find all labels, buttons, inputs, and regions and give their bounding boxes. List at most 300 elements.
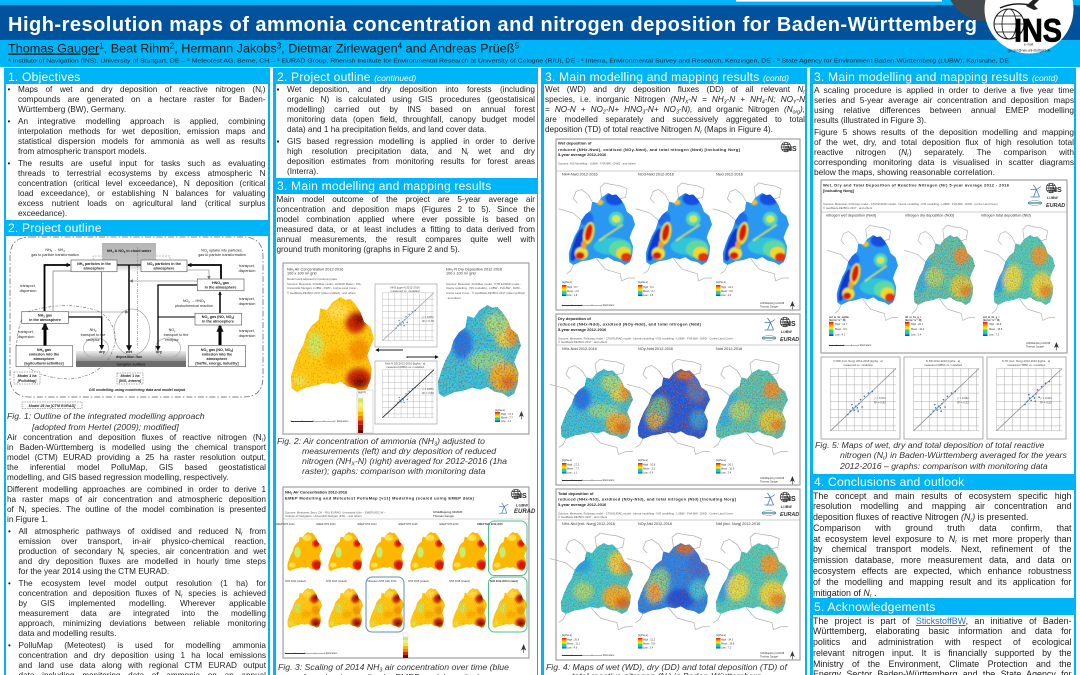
heading: main results continued (column 4): 3. Main modelling and mapping results (contd): [814, 70, 1058, 84]
logo: INS: [984, 0, 1074, 54]
text: main results: [276, 195, 535, 254]
authors: , Dietmar Zirlewagen: [281, 42, 398, 56]
affiliations: 5: [777, 57, 781, 62]
figure 1: integrated modelling diagram: particles in the: [84, 262, 111, 266]
figure 4: total deposition panel: NHx-Ntd [incl. Norg] 2012-2016: [562, 522, 615, 526]
figure 4: dry deposition panel: High : 17.2: [567, 464, 580, 466]
caption: figure 2: nitrogen (NHX-N) (right) averaged for 2012-2016 (1ha: [302, 456, 507, 468]
text: figure 5 description: Figure 5 shows results of the deposition modelling and mapping: [814, 127, 1074, 137]
figure 5: wet, dry and total deposition maps: [kg ha⁻¹a⁻¹ N]: [983, 318, 1000, 322]
figure 4: dry deposition panel: Low : 0.4: [643, 472, 654, 474]
figure 4: wet deposition panel: Mean : 5.6: [721, 290, 733, 293]
text: conclusions: of the modelling and mapping result and its application for: [813, 577, 1072, 587]
figure 1: integrated modelling diagram: dispersion: [239, 269, 255, 273]
logo: INS: INS: [1014, 12, 1062, 48]
figure 1: integrated modelling diagram: [agricultural activities]: [24, 362, 64, 366]
caption: figure 2: Fig. 2: Air concentration of ammonia (NH3) adjusted to: [277, 436, 485, 448]
figure 4: wet deposition panel: NO3-Nwd 2012-2016: [638, 172, 674, 176]
figure 1: integrated modelling diagram: gas: [222, 281, 229, 285]
text: regression bullet: high resolution precipitation data, and Nr wet and dry: [287, 147, 535, 158]
figure 5: wet, dry and total deposition maps: Low : 7.2: [989, 334, 1000, 336]
caption: figure 2: raster); gaphs: comparison with monitoring data: [302, 466, 486, 476]
text: main results: measured data, or at least includes a fitting to data derived from: [276, 225, 535, 234]
scatter: NH3 concentration: y = 0,87x: [422, 315, 434, 319]
caption: figure 5: [815, 440, 1067, 471]
figure 2: NH3 air concentration and dry deposition: NH: [446, 268, 451, 272]
figure 3: scaling of NH3 concentration: Institute of Navigation, Universität Stuttgart (INS) – and others: [285, 514, 362, 518]
figure 1: integrated modelling diagram: transport,: [239, 264, 255, 268]
figure 1: integrated modelling diagram: NO: [202, 315, 207, 319]
text: resolution bullet: The ecosystem level model output resolution (1 ha) for: [18, 579, 266, 588]
text: conclusions: by chemical transport models. Next, refinement of the: [813, 544, 1072, 554]
figure 1: integrated modelling diagram: [traffic, energy, industry]: [195, 362, 239, 366]
figure 1: integrated modelling diagram: receptor surface: [117, 362, 145, 366]
text: model combination: [7, 485, 266, 524]
figure 1: integrated modelling diagram: emission into the: [29, 352, 59, 356]
figure 1: integrated modelling diagram: [10, 237, 263, 408]
figure 1: integrated modelling diagram: Model 25 ha [CTM EURAD]: [29, 404, 76, 408]
column 4 frame: [810, 68, 1076, 675]
row labels: scaled: NH3 2012-2016 (scaled): [490, 580, 518, 583]
figure 4: total deposition panel: NOy-Ntd 2012-2016: [638, 522, 672, 526]
text: wet and dry deposition fluxes: [545, 85, 806, 136]
text: conclusions: at ecosystem level exposure to Nr is met more properly than: [813, 534, 1072, 545]
text: conclusions: mitigation of Nr .: [813, 588, 877, 599]
logos: figure 3: LUBW: [516, 502, 529, 508]
text: acknowledgements: relevant nitrogen input. It is financially supported by the: [813, 648, 1072, 658]
figure 1: integrated modelling diagram: 2: [231, 349, 233, 353]
text: objectives bullet 3: concentration (critical level exceedance), N deposition (critical: [18, 179, 266, 188]
figure 5: wet, dry and total deposition maps: © GeoBasis-DE BKG 2017 - and others: [823, 206, 873, 210]
scatter: N total deposition: measured (TBM) vs. modelled: [1007, 363, 1045, 367]
figure 2: NH3 air concentration and dry deposition: Sources: Meteotest, PolluMap model - EURAD Model - INS,: [287, 282, 362, 286]
figure 3: scaling of NH3 concentration: Sources: Meteotest, Bern, CH – RIU EURAD, Universität Köln – EMEP MSC-W –: [285, 510, 386, 514]
figure 1: integrated modelling diagram: uptake into particles,: [208, 248, 243, 252]
heading: project outline continued: 2. Project outline (continued): [277, 70, 416, 84]
legend: NH3 classes: [357, 390, 373, 433]
text: model description: Air concentration and deposition fluxes of reactive nitrogen (Nr): [7, 433, 266, 444]
text: conclusions: resolution modelling and mapping air concentration and: [813, 501, 1072, 511]
scatter: NH3 concentration: [375, 284, 437, 347]
figure 1: integrated modelling diagram: 3: [220, 282, 222, 286]
figure 5: wet, dry and total deposition maps: High : 26.1: [911, 323, 924, 326]
column 3 frame: [541, 68, 807, 675]
figure 4: dry deposition panel: GIS/Mapping 11/2018: [760, 477, 785, 480]
figure 4: dry deposition panel: NOy-Ndd 2012-2016: [638, 347, 673, 351]
figure 1: integrated modelling diagram: NH: [107, 249, 112, 253]
figure 1: integrated modelling diagram: transport to the: [81, 333, 105, 337]
text: pathways bullet: for the year 2014 using the CTM EURAD.: [18, 567, 169, 576]
figure 4: wet deposition panel: Thomas Gauger: [760, 306, 778, 308]
row labels: EMEP: EMEP NH3 2013: [316, 523, 336, 526]
figure 2: NH3 air concentration and dry deposition: - and others: [446, 296, 462, 300]
figure 4: wet deposition panel: Sources: INS Modelling - LUBW - FVA-BW - DWD - and others: [558, 162, 636, 166]
figure 5: wet, dry and total deposition maps: nitrogen wet deposition (Nwd): [826, 214, 877, 218]
figure 4: wet deposition panel: Low : 1.8: [643, 294, 654, 297]
text: conclusions: Comparison with ground truth data confirm, that: [813, 523, 1072, 533]
figure 4: total deposition panel: [kg/ha·a]: [716, 634, 726, 637]
text: model combination: in Figure 1.: [7, 515, 48, 524]
figure 5: wet, dry and total deposition maps: Thomas Gauger: [1026, 346, 1044, 348]
figure 2: NH3 air concentration and dry deposition: -N Dry Deposition 2012-2016: [453, 268, 502, 272]
scatter: N dry deposition: y = 0,99x: [957, 396, 969, 400]
figure 5: wet, dry and total deposition maps: [including Norg]: [823, 188, 855, 193]
text: objectives bullet 2: interpolation methods for wet deposition, emission maps and: [18, 127, 266, 136]
text: main results: concentration and deposition maps (Figures 2 to 5). Since the: [276, 205, 535, 214]
figure 5: wet, dry and total deposition maps: [821, 180, 1067, 353]
figure 4: dry deposition panel: Mean : 10.9: [721, 468, 735, 470]
figure 4: dry deposition panel: Ndd 2012-2016: [716, 347, 742, 351]
figure 1: integrated modelling diagram: dispersion: [18, 335, 34, 339]
figure 5: wet, dry and total deposition maps: dd_m_6s_g_r: [905, 316, 921, 319]
figure 4: total deposition panel: Low : 7.2: [721, 646, 732, 650]
figure 4: wet deposition panel: reduced (NHx-Nwd), oxidised (NOy-Nwd), and total nitrogen (Nwd) [including Norg]: [558, 147, 741, 152]
legend: dry deposition: [495, 409, 514, 423]
scatter: N wet deposition: measured vs. modelled: [844, 363, 873, 367]
figure 1: integrated modelling diagram: y: [206, 350, 208, 353]
scatter: NHx-N dry deposition: NHx-N DD 2012-2016 [kg/ha · a]: [385, 362, 426, 366]
caption: figure 2: measurements (left) and dry deposition of reduced: [302, 446, 496, 456]
scatter: NH3 concentration: R² = 0,78: [422, 319, 434, 323]
text: ▪: [276, 85, 279, 94]
figure 1: integrated modelling diagram: dry: [99, 350, 106, 354]
scatter: NHx-N dry deposition: y = 0,87x: [422, 387, 434, 391]
scatter: N dry deposition: N DD 2012-2016 [kg/ha · a]: [926, 359, 960, 363]
affiliations: 4: [581, 57, 585, 62]
scale and north arrow: figure 3: [285, 644, 526, 655]
affiliations: 3: [277, 57, 280, 62]
text: objectives bullet 1: [8, 85, 266, 114]
scale bar: kilometers: [337, 420, 349, 423]
figure 1: integrated modelling diagram: NO: [147, 262, 153, 266]
figure 1: integrated modelling diagram: [INS, Interra]: [118, 379, 142, 383]
figure 5: wet, dry and total deposition maps: [kg ha⁻¹a⁻¹ N]: [905, 318, 922, 322]
figure 1: integrated modelling diagram: 4: [63, 249, 65, 253]
figure 2: NH3 air concentration and dry deposition: 3: [292, 268, 294, 272]
affiliations: 2: [187, 57, 191, 62]
figure 4: dry deposition panel: [kg/ha·a]: [716, 459, 726, 462]
scatter: NHx-N dry deposition: measured (DBM) vs. modelled: [386, 365, 424, 369]
figure 1: integrated modelling diagram: atmosphere: [207, 357, 227, 361]
text: wet and dry deposition bullet: data) and 1 ha precipitation fields, and land cover data.: [287, 125, 486, 134]
figure 2: NH3 air concentration and dry deposition: 3: [451, 268, 453, 272]
figure 4: total deposition panel: Low : 4.9: [567, 646, 578, 650]
text: resolution bullet: data and modelling results.: [18, 629, 116, 638]
figure 1: integrated modelling diagram: NO: [183, 299, 188, 303]
caption: figure 3: Fig. 3: Scaling of 2014 NH3 air concentration over time (blue: [278, 662, 509, 674]
text: objectives bullet 2: from atmospheric transport models.: [18, 147, 147, 156]
figure 4: dry deposition panel: INS: [784, 321, 796, 328]
text: wet and dry deposition fluxes: Wet (WD) and dry deposition fluxes (DD) of all relevant Nr: [545, 85, 805, 96]
figure 1: integrated modelling diagram: photochemical reaction: [175, 304, 213, 308]
legend: dry deposition: [kg/ha·a]: [495, 409, 505, 412]
text: objectives bullet 3: [8, 159, 266, 218]
figure 1: integrated modelling diagram: NH: [37, 348, 42, 352]
text: model combination: of Nr species. The outline of the model combination is presented: [7, 505, 266, 516]
text: PolluMap bullet: [8, 641, 266, 675]
frames: green and blue highlights: [366, 521, 527, 632]
figure 4: wet deposition panel: kilometers: [603, 304, 615, 307]
figure 1: integrated modelling diagram: dispersion: [239, 302, 255, 306]
figure 4: dry deposition panel: Sources: Meteotest, Polluway model - CTM EURAD model - Interra modelling - INS modelling - LUBW - FVA-BW - DWD - Corine Land Cover: [558, 336, 733, 340]
figure 1: integrated modelling diagram: wet: [125, 350, 133, 354]
text: pathways bullet: and dry deposition fluxes are modelled in hourly time steps: [18, 557, 266, 566]
scatter: N dry deposition: measured (DBM) vs. modelled: [924, 363, 962, 367]
figure 2: NH3 air concentration and dry deposition: Interra modelling - INS modelling - LUBW - FVA-BW - DWD -: [446, 286, 521, 290]
figure 4: dry deposition panel: 5-year average 2012-2016: [558, 327, 607, 332]
figure 2: NH3 air concentration and dry deposition: 100 x 100 m² grid: [446, 272, 476, 276]
text: wet and dry deposition bullet: organic N) is calculated using GIS procedures (geostatisical: [287, 95, 535, 104]
text: figure 5 description: corresponding monitoring data is visualised in scatter diagrams: [814, 157, 1074, 167]
caption: figure 2: [277, 436, 507, 476]
text: objectives bullet 3: The results are useful input for tasks such as evaluating: [18, 159, 266, 168]
text: regression bullet: (Interra).: [287, 167, 318, 176]
figure 1: integrated modelling diagram: receptor: [165, 338, 180, 342]
text: objectives bullet 3: threads to terrestrial ecosystems by excess atmospheric N: [18, 169, 266, 178]
row labels: EMEP: EMEP NH3 2015: [398, 523, 418, 526]
scatter: N wet deposition: [821, 357, 900, 439]
figure 4: total deposition panel: High : 34.3: [721, 638, 734, 642]
text: objectives bullet 3: exceedance).: [18, 209, 67, 218]
figure 1: integrated modelling diagram: Model 1 ha: [17, 374, 37, 378]
text: figure 5 description: below the maps, showing reasonable correlation.: [814, 167, 995, 177]
text: objectives bullet 3: load exceedance), or establishing N balances for valuating: [18, 189, 266, 198]
figure 4: wet deposition panel: NH4-Nwd 2012-2016: [562, 172, 598, 176]
figure 5: wet, dry and total deposition maps: GIS/Mapping 11/2018: [1026, 342, 1051, 345]
figure 1: integrated modelling diagram: Model 1 ha: [120, 374, 140, 378]
authors: Thomas Gauger: [8, 42, 99, 56]
figure 4: wet deposition panel: Mean : 2.9: [567, 290, 579, 293]
figure 4: wet deposition panel: Low : 1.8: [567, 294, 578, 297]
scatter: N total deposition: N TD (incl. Norg) 2012-2016 [kg/ha · a]: [1002, 359, 1050, 363]
text: •: [8, 85, 10, 94]
figure 1: integrated modelling diagram: in the atmosphere: [202, 320, 234, 324]
scatter: NH3 concentration: NH3 [µg/m³] 2012-2016: [390, 286, 420, 290]
affiliations: State Agency for Environment Baden-Württemberg (LUBW), Karlsruhe, DE: [780, 58, 1009, 64]
logo: INS: gauger@nav.uni-stuttgart.de: [1008, 48, 1050, 52]
figure 1: integrated modelling diagram: NO: [201, 248, 207, 252]
figure 1: integrated modelling diagram: NO: [169, 328, 174, 332]
text: PolluMap bullet: and land use data along with regional CTM EURAD output: [18, 661, 266, 670]
column 1 frame: [4, 68, 270, 675]
figure 2: NH3 air concentration and dry deposition: © GeoBasis-DE BKG 2017 (data modified) - and others: [287, 291, 356, 295]
text: acknowledgements: Württemberg, elaborating basic information and data for: [813, 626, 1072, 636]
heading: project outline: 2. Project outline: [8, 221, 102, 235]
grey corner circle: [946, 0, 1024, 21]
figure 2: NH3 air concentration and dry deposition: Model result adjusted to monitoring data: [287, 277, 337, 281]
figure 2: NH3 air concentration and dry deposition: NH: [287, 268, 292, 272]
column 2 frame: [273, 68, 538, 675]
figure 4: dry deposition panel: reduced (NHx-Ndd), oxidised (NOy-Ndd), and total nitrogen (Ndd): [558, 322, 702, 326]
figure 4: total deposition panel: reduced (NHx-Ntd), oxidised (NOy-Ntd), and total nitrogen (Ntd) [including Norg]: [558, 496, 737, 502]
figure 4: dry deposition panel: kilometers: [603, 479, 615, 482]
figure 4: total deposition panel: 5-year average 2012-2016: [558, 502, 607, 507]
figure 1: integrated modelling diagram: in cloud water: [125, 249, 152, 253]
text: wet and dry deposition fluxes: are modelled separately and successively aggregated to total: [545, 115, 805, 124]
maps: EMEP row: [287, 532, 527, 571]
logo: INS: e-mail:: [1024, 42, 1034, 46]
figure 1: integrated modelling diagram: 3: [124, 250, 126, 254]
figure 1: integrated modelling diagram: 3: [51, 249, 53, 253]
figure 5: wet, dry and total deposition maps: LUBW: [1047, 196, 1058, 200]
scatter: NHx-N dry deposition: R² = 0,59: [422, 391, 434, 395]
affiliations: Meteotest AG, Berne, CH –: [190, 58, 277, 64]
text: PolluMap bullet: concentration and dry deposition using 1 ha local emissions: [18, 651, 266, 660]
caption: figure 1: [7, 411, 205, 432]
figure 4: total deposition panel: [kg/ha·a]: [562, 634, 572, 637]
figure 4: total deposition panel: Total deposition of: [558, 491, 594, 496]
text: wet and dry deposition bullet: modelling) carried out by INS based on annual forest: [287, 105, 535, 114]
header band: [0, 0, 1080, 67]
logos: figure 3: EURAD: [514, 509, 536, 515]
row labels: scaled: Meteotest NH3 [v11] 2014: [368, 580, 397, 583]
figure 4: dry deposition panel: High : 10.8: [643, 464, 656, 466]
affiliations: EURAD Group, Rhenish Institute for Environmental Research at University of Cologne (RIU), DE -: [280, 58, 581, 64]
text: pathways bullet: production of secondary Nr species, air concentration and wet: [18, 547, 266, 558]
text: figure 5 description: [814, 127, 1074, 177]
row labels: EMEP: EMEP NH3 2014: [358, 523, 377, 526]
figure 5: wet, dry and total deposition maps: Mean : 6.9: [835, 328, 847, 331]
text: PolluMap bullet: PolluMap (Meteotest) is used for modelling ammonia: [18, 641, 266, 650]
caption: figure 5: 2012-2016 – graphs: comparison with monitoring data: [840, 461, 1048, 471]
text: main results: annual measurements, the result compares quite well with: [276, 235, 535, 244]
figure 1: integrated modelling diagram: transport,: [20, 284, 36, 288]
row labels: EMEP: EMEP NH3 2012-2016: [477, 523, 503, 526]
figure 4: wet deposition panel: 5-year average 2012-2016: [558, 152, 607, 157]
text: model description: in Baden-Württemberg is modelled using the chemical transport: [7, 443, 266, 452]
figure 1: integrated modelling diagram: y: [207, 317, 209, 320]
figure 4: total deposition panel: Mean : 11.1: [567, 642, 581, 646]
caption: figure 4: Fig. 4: Maps of wet (WD), dry (DD) and total deposition (TD) of: [546, 662, 787, 672]
legend: dry deposition: High : 17.2: [501, 413, 514, 416]
text: acknowledgements: The project is part of StickstoffBW, an initiative of Baden-: [813, 616, 1071, 626]
arrow: to right map: [407, 357, 438, 358]
figure 1: integrated modelling diagram: gas: [45, 314, 52, 318]
figure 3: scaling of NH3 concentration: Air Concentration 2012-2016: [292, 490, 348, 494]
text: objectives bullet 1: Württemberg (BW), Germany.: [18, 105, 126, 114]
figure 5: wet, dry and total deposition maps: Low : 4.1: [835, 334, 846, 336]
figure 1: integrated modelling diagram: 4: [82, 263, 84, 267]
figure 4: total deposition panel: Ntd [incl. Norg] 2012-2016: [716, 522, 760, 526]
text: scaling procedure: using relative differences between annual EMEP modelling: [814, 105, 1074, 115]
figure 4: total deposition panel: High : 12.2: [643, 638, 656, 642]
figure 5: wet, dry and total deposition maps: High : 14.7: [835, 323, 848, 326]
figure 1: integrated modelling diagram: transport,: [239, 329, 255, 333]
text: model description: modelling, and GIS based regression modelling, respectively.: [7, 473, 228, 482]
text: regression bullet: [276, 137, 535, 176]
figure 4: dry deposition panel: Mean : 7.7: [567, 468, 579, 470]
figure 1: integrated modelling diagram: transport,: [239, 297, 255, 301]
authors: 5: [514, 42, 520, 50]
figure 4: dry deposition panel: High : 26.1: [721, 464, 734, 466]
figure 4: total deposition panel: LUBW: [781, 505, 792, 509]
text: acknowledgements: Ministry of the Environment, Climate Protection and the: [813, 659, 1072, 669]
scatter: NH3 concentration: measured vs. modelled: [391, 289, 420, 293]
row labels: scaled: NH3 2016 (scaled): [449, 580, 470, 583]
title band: [0, 5, 1080, 40]
figure 1: integrated modelling diagram: NO: [201, 348, 206, 352]
row labels: EMEP: EMEP NH3 2016: [440, 523, 459, 526]
scatter: N wet deposition: R² = 0,82: [874, 400, 886, 404]
text: figure 5 description: reactive nitrogen (Nr) separately. The comparison with: [814, 147, 1074, 158]
heading: conclusions: 4. Conclusions and outlook: [814, 475, 964, 489]
figure 5: wet, dry and total deposition maps: INS: [1050, 187, 1062, 194]
scale bar: [291, 420, 349, 423]
figure 1: integrated modelling diagram: gas to particle transformation: [31, 253, 79, 257]
text: objectives bullet 2: [8, 117, 266, 156]
figure 4: dry deposition panel: Dry deposition of: [558, 316, 592, 321]
row labels: EMEP: EMEP NH3 2012: [276, 523, 295, 526]
figure 1: integrated modelling diagram: 3: [204, 300, 206, 304]
figure 1: integrated modelling diagram: gas (NO, NO: [209, 315, 232, 319]
row labels: EMEP: [276, 523, 503, 526]
affiliations: 1: [8, 57, 12, 62]
figure 1: integrated modelling diagram: gas (NO, NO: [208, 348, 231, 352]
text: pathways bullet: [8, 527, 266, 576]
text: resolution bullet: measurement data are integrated into the modelling: [18, 609, 266, 618]
text: objectives bullet 1: Maps of wet and dry deposition of reactive nitrogen (Nr): [18, 85, 266, 96]
figure 4: dry deposition panel: [kg/ha·a]: [562, 459, 572, 462]
white bar at top: [736, 0, 942, 2]
figure 5: wet, dry and total deposition maps: wd_m_6s_ag/dw: [829, 316, 849, 319]
text: objectives bullet 1: compounds are generated on a hectare raster for Baden-: [18, 95, 266, 104]
figure 1: integrated modelling diagram: deposition flux: [116, 355, 143, 359]
figure 1: integrated modelling diagram: NH: [45, 248, 51, 252]
text: resolution bullet: approach, minimizing deviations between reliable monitoring: [18, 619, 266, 628]
figure 4: wet deposition panel: High : 5.4: [643, 286, 654, 289]
figure 1: integrated modelling diagram: HNO: [212, 281, 220, 285]
text: •: [8, 117, 10, 126]
text: acknowledgements: [813, 616, 1072, 675]
figure 1: integrated modelling diagram: dispersion: [239, 334, 255, 338]
figure 1: integrated modelling diagram: particles in the: [154, 262, 181, 266]
caption: figure 1: Fig. 1: Outline of the integrated modelling approach: [7, 411, 205, 421]
heading: objectives: 1. Objectives: [8, 70, 81, 84]
text: wet and dry deposition bullet: [276, 85, 535, 134]
text: main results: model combination applied where ever possible is based on: [276, 215, 535, 224]
scatter: N dry deposition: R² = 0,32: [957, 400, 969, 404]
figure 4: total deposition panel: Sources: Meteotest, Polluway model - CTM EURAD model - Interra modelling - INS modelling - LUBW - FVA-BW - DWD - Corine Land Cover: [558, 512, 733, 516]
maps: scaled row: [287, 588, 527, 628]
heading: acknowledgements: 5. Acknowledgements: [814, 600, 935, 614]
text: figure 5 description: of the wet, dry, and total deposition flux of high resolution total: [814, 137, 1074, 147]
figure 1: integrated modelling diagram: 2: [188, 300, 190, 304]
figure 1: integrated modelling diagram: → NH: [52, 248, 64, 252]
text: conclusions: [813, 490, 1072, 599]
heading: main results: 3. Main modelling and mapping results: [277, 179, 491, 193]
figure 1: integrated modelling diagram: 3: [42, 349, 44, 353]
text: scaling procedure: results (illustrated in Figure 3).: [814, 115, 926, 125]
text: objectives bullet 3: excess nutrient loads on agricultural land (critical surplus: [18, 199, 266, 208]
legend: dry deposition: Mean : 7.7: [501, 416, 513, 420]
caption: figure 1: [adopted from Hertel (2009); modified]: [32, 422, 179, 432]
figure 4: total deposition panel: EURAD: [780, 512, 799, 518]
text: resolution bullet: concentration and deposition fluxes of Nr species is achieved: [18, 589, 266, 600]
authors: 3: [277, 42, 282, 50]
authors: and Andreas Prüeß: [402, 42, 515, 56]
figure 1: integrated modelling diagram: NH: [38, 314, 43, 318]
text: scaling procedure: series and 5-year average air concentration and deposition maps: [814, 95, 1074, 105]
text: model description: the inferential model PolluMap, GIS based geostatistical: [7, 463, 266, 472]
figure 1: integrated modelling diagram: emission into the: [202, 352, 232, 356]
text: •: [8, 641, 11, 650]
figure 1: integrated modelling diagram: 3: [43, 314, 45, 318]
affiliations: Institute of Navigation (INS), University of Stuttgart, DE –: [11, 58, 187, 64]
text: conclusions: ecosystem effects are expected, which enhance robustness: [813, 566, 1072, 576]
figure 1: integrated modelling diagram: → HNO: [190, 299, 204, 303]
figure 4: wet deposition panel: [kg/ha·a]: [562, 281, 572, 284]
figure 4: dry deposition panel: Low : 1.1: [567, 472, 578, 474]
